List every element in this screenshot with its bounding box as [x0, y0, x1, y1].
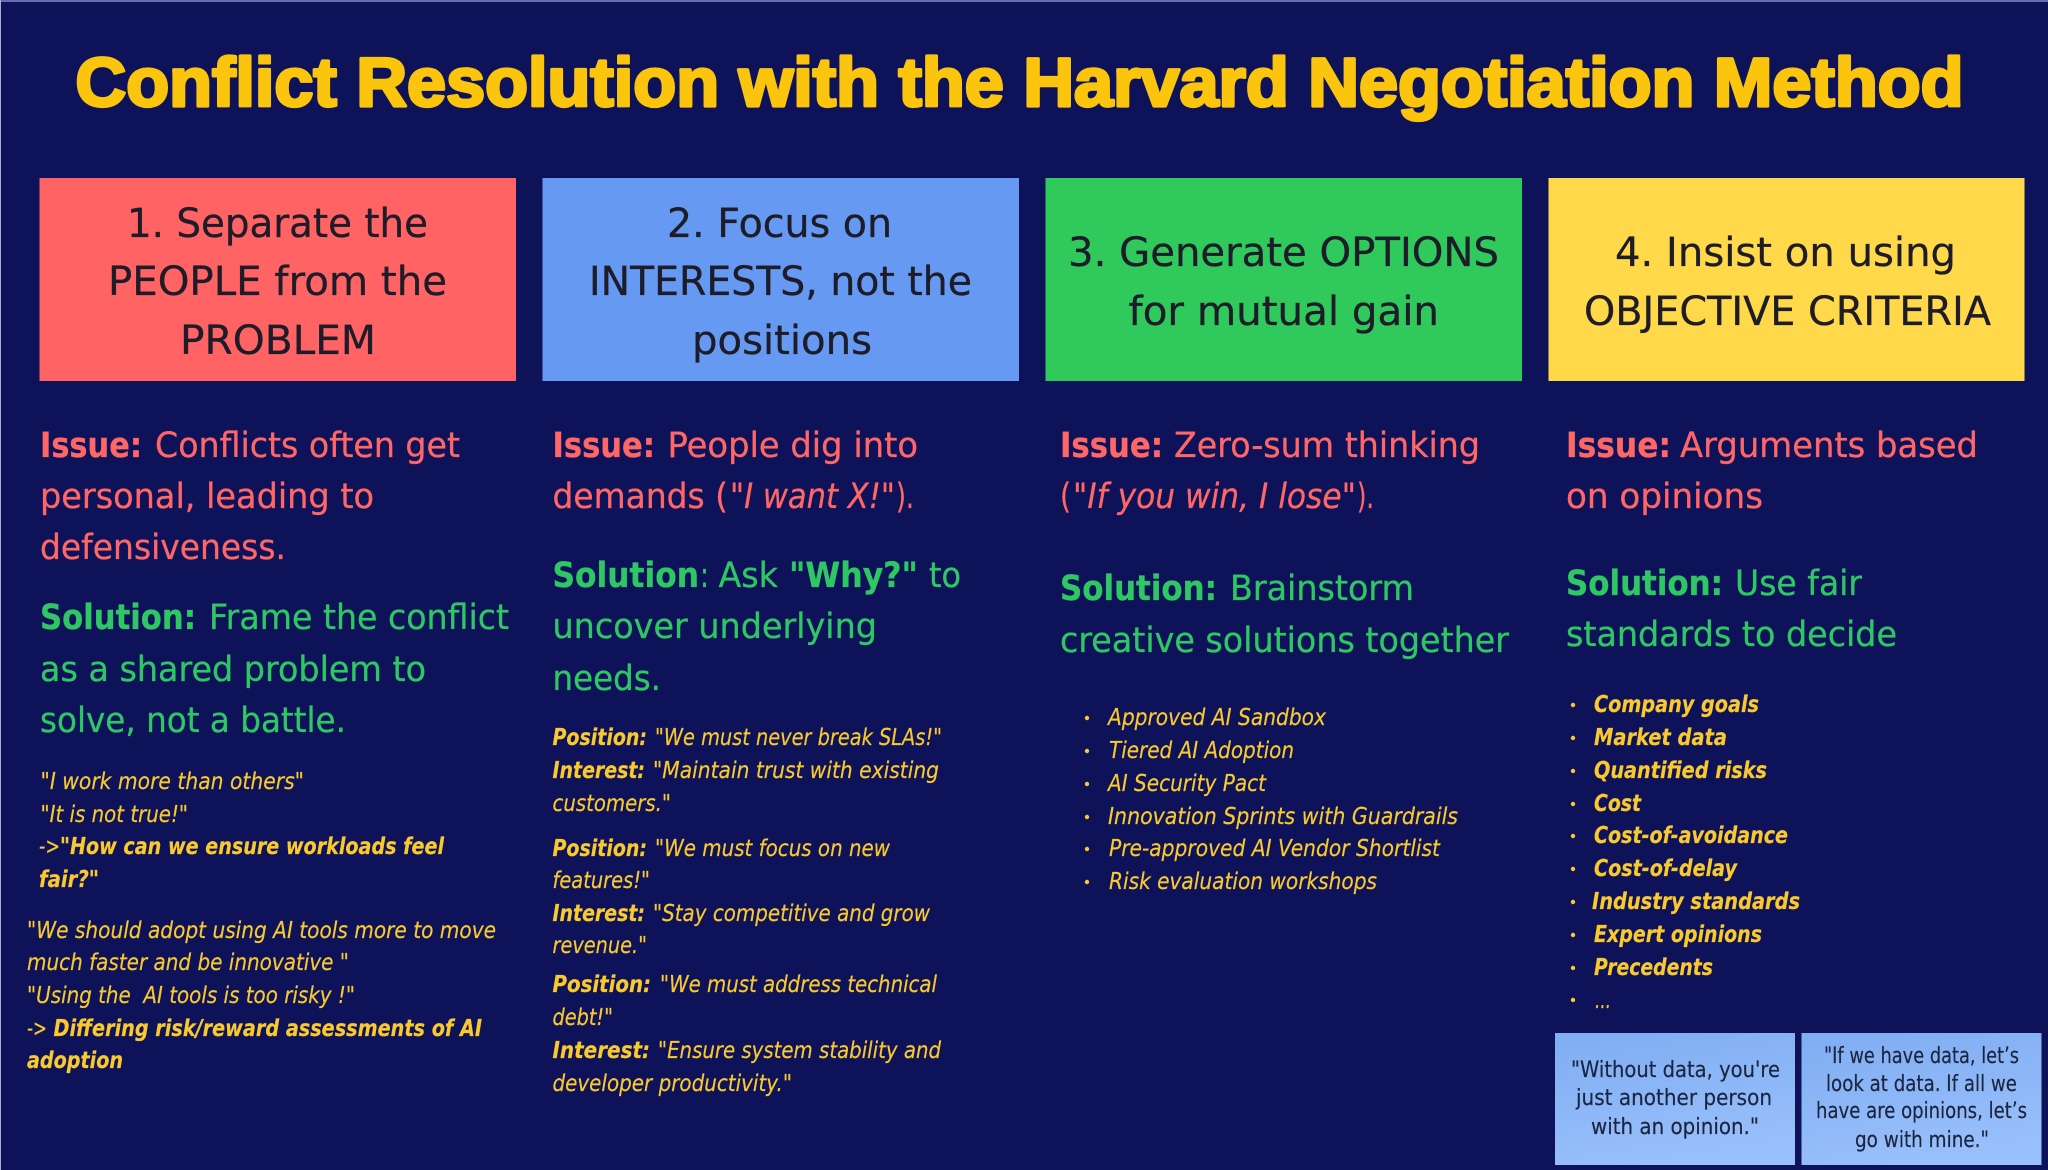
text block: tech debt position and interest: Position:	[552, 972, 651, 998]
panel: header 4 objective criteria	[1548, 178, 2024, 381]
title: Conflict Resolution with the Harvard Negotiation Method	[76, 44, 1963, 121]
list: column 4 objective criteria: Company goals	[1594, 692, 1759, 718]
text block: SLA position and interest: "We must never break SLAs!"	[655, 725, 942, 751]
panel: header 3 generate options	[1046, 178, 1522, 381]
text block: column 1 AI adoption example: adoption	[27, 1048, 123, 1074]
text block: column 1 workload example: "I work more than others"	[40, 769, 304, 795]
panel: header 4 objective criteria: 4. Insist on using	[1615, 230, 1956, 276]
text block: column 3 solution: creative solutions together	[1060, 621, 1510, 661]
text block: features position and interest: "Stay competitive and grow	[653, 901, 930, 927]
text block: column 2 issue: demands (	[552, 477, 728, 517]
text block: features position and interest: Position:	[552, 836, 647, 862]
list: column 4 objective criteria	[1571, 692, 1800, 1014]
text block: column 2 solution	[552, 556, 961, 699]
list: column 3 option ideas: Risk evaluation workshops	[1109, 869, 1377, 895]
text block: column 1 solution: solve, not a battle.	[40, 701, 346, 741]
panel: header 1 separate the people	[40, 178, 516, 381]
panel: header 1 separate the people: PROBLEM	[180, 318, 376, 364]
text block: column 1 issue: personal, leading to	[40, 477, 374, 517]
text block: SLA position and interest: Interest:	[552, 758, 645, 784]
text block: column 3 issue: Issue:	[1060, 426, 1163, 466]
text block: column 1 solution: Frame the conflict	[209, 598, 509, 638]
text block: column 2 issue: "I want X!"	[730, 477, 895, 517]
text block: column 1 workload example: ->	[39, 834, 60, 860]
panel: header 1 separate the people: 1. Separate the	[127, 201, 428, 247]
text block: column 1 AI adoption example: ->	[27, 1016, 47, 1042]
text block: features position and interest: Interest:	[552, 901, 645, 927]
panel: header 2 focus on interests: 2. Focus on	[667, 201, 892, 247]
list: column 3 option ideas: AI Security Pact	[1106, 771, 1267, 797]
callout: data quote right: go with mine."	[1855, 1128, 1989, 1153]
text block: column 2 solution: uncover underlying	[552, 607, 877, 647]
text block: column 3 issue	[1060, 426, 1480, 517]
text block: column 3 issue: (	[1060, 477, 1071, 517]
text block: column 4 solution: Use fair	[1735, 564, 1863, 604]
text block: column 1 solution	[40, 598, 509, 741]
text block: column 1 workload example: "It is not true!"	[40, 802, 188, 828]
text block: column 4 issue	[1566, 426, 1978, 517]
list: column 3 option ideas: Approved AI Sandbox	[1106, 705, 1326, 731]
list: column 3 option ideas: Tiered AI Adoption	[1109, 738, 1294, 764]
text block: column 3 solution: Solution:	[1060, 569, 1217, 609]
text block: column 3 solution: Brainstorm	[1230, 569, 1414, 609]
text block: column 1 workload example	[39, 769, 445, 893]
list: column 4 objective criteria: Market data	[1594, 725, 1727, 751]
text block: tech debt position and interest	[552, 972, 941, 1097]
text block: SLA position and interest: "Maintain trust with existing	[653, 758, 939, 784]
text block: column 4 issue: on opinions	[1566, 477, 1763, 517]
text block: column 2 solution: Solution	[552, 556, 699, 596]
callout: data quote left: "Without data, you're	[1571, 1058, 1780, 1083]
text block: column 2 issue	[552, 426, 918, 517]
text block: tech debt position and interest: debt!"	[552, 1005, 613, 1031]
panel: header 3 generate options: 3. Generate OPTIONS	[1068, 230, 1499, 276]
text block: SLA position and interest: Position:	[552, 725, 647, 751]
panel: header 2 focus on interests	[542, 178, 1019, 381]
panel: header 4 objective criteria: OBJECTIVE CRITERIA	[1584, 289, 1992, 335]
text block: column 3 issue: "If you win, I lose"	[1073, 477, 1356, 517]
text block: column 2 issue: ).	[896, 477, 914, 517]
panel: header 2 focus on interests: INTERESTS, not the	[589, 259, 972, 305]
text block: column 2 solution: to	[929, 556, 961, 596]
text block: column 1 solution: as a shared problem to	[40, 650, 426, 690]
list: column 4 objective criteria: ...	[1595, 988, 1611, 1014]
text block: features position and interest	[552, 836, 930, 959]
text block: column 1 issue	[40, 426, 460, 568]
text block: column 1 workload example: "How can we ensure workloads feel	[60, 834, 445, 860]
text block: column 1 issue: Conflicts often get	[155, 426, 460, 466]
text block: column 2 solution: :	[700, 556, 709, 596]
text block: tech debt position and interest: developer productivity."	[552, 1071, 792, 1097]
list: column 4 objective criteria: Cost	[1594, 791, 1642, 817]
text block: tech debt position and interest: "Ensure system stability and	[658, 1038, 941, 1064]
text block: column 1 workload example: fair?"	[39, 867, 99, 893]
text block: column 2 solution: "Why?"	[789, 556, 918, 596]
text block: column 3 solution	[1060, 569, 1510, 661]
callout: data quote left	[1555, 1033, 1795, 1165]
list: column 4 objective criteria: Industry standards	[1592, 889, 1800, 915]
panel: header 2 focus on interests: positions	[692, 318, 872, 364]
text block: column 1 solution: Solution:	[40, 598, 196, 638]
text block: features position and interest: features!"	[552, 868, 650, 894]
list: column 4 objective criteria: Quantified risks	[1594, 758, 1767, 784]
text block: SLA position and interest	[552, 725, 942, 817]
list: column 3 option ideas	[1085, 705, 1458, 895]
callout: data quote left: just another person	[1575, 1086, 1772, 1111]
text block: column 1 AI adoption example: "Using the AI tools is too risky !"	[27, 983, 355, 1009]
text block: column 4 solution: standards to decide	[1566, 615, 1897, 655]
text block: column 4 issue: Arguments based	[1680, 426, 1978, 466]
text block: column 4 solution	[1566, 564, 1897, 655]
list: column 4 objective criteria: Precedents	[1594, 955, 1713, 981]
text block: column 4 issue: Issue:	[1566, 426, 1671, 466]
text block: SLA position and interest: customers."	[552, 791, 671, 817]
text block: features position and interest: revenue."	[552, 933, 647, 959]
list: column 4 objective criteria: Cost-of-delay	[1594, 856, 1738, 882]
panel: header 1 separate the people: PEOPLE from the	[108, 259, 447, 305]
text block: column 1 AI adoption example: Differing risk/reward assessments of AI	[54, 1016, 482, 1042]
text block: column 3 issue: ).	[1357, 477, 1374, 517]
panel: header 3 generate options: for mutual gain	[1128, 289, 1439, 335]
text block: column 4 solution: Solution:	[1566, 564, 1723, 604]
text block: column 2 solution: needs.	[552, 659, 661, 699]
text block: features position and interest: "We must focus on new	[655, 836, 890, 862]
text block: column 3 issue: Zero-sum thinking	[1174, 426, 1480, 466]
text block: column 2 solution: Ask	[718, 556, 779, 596]
callout: data quote left: with an opinion."	[1591, 1115, 1759, 1140]
callout: data quote right	[1802, 1033, 2042, 1165]
list: column 3 option ideas: Pre-approved AI Vendor Shortlist	[1109, 836, 1441, 862]
text block: column 1 issue: defensiveness.	[40, 528, 286, 568]
text block: column 1 issue: Issue:	[40, 426, 142, 466]
list: column 4 objective criteria: Cost-of-avoidance	[1594, 823, 1788, 849]
text block: column 2 issue: People dig into	[668, 426, 918, 466]
text block: tech debt position and interest: Interest:	[552, 1038, 650, 1064]
text block: column 1 AI adoption example: much faster and be innovative "	[27, 950, 349, 976]
text block: column 2 issue: Issue:	[552, 426, 655, 466]
list: column 3 option ideas: Innovation Sprints with Guardrails	[1108, 804, 1458, 830]
text block: column 1 AI adoption example: "We should adopt using AI tools more to move	[27, 918, 496, 944]
list: column 4 objective criteria: Expert opinions	[1594, 922, 1762, 948]
text block: tech debt position and interest: "We must address technical	[660, 972, 938, 998]
text block: column 1 AI adoption example	[27, 918, 496, 1074]
